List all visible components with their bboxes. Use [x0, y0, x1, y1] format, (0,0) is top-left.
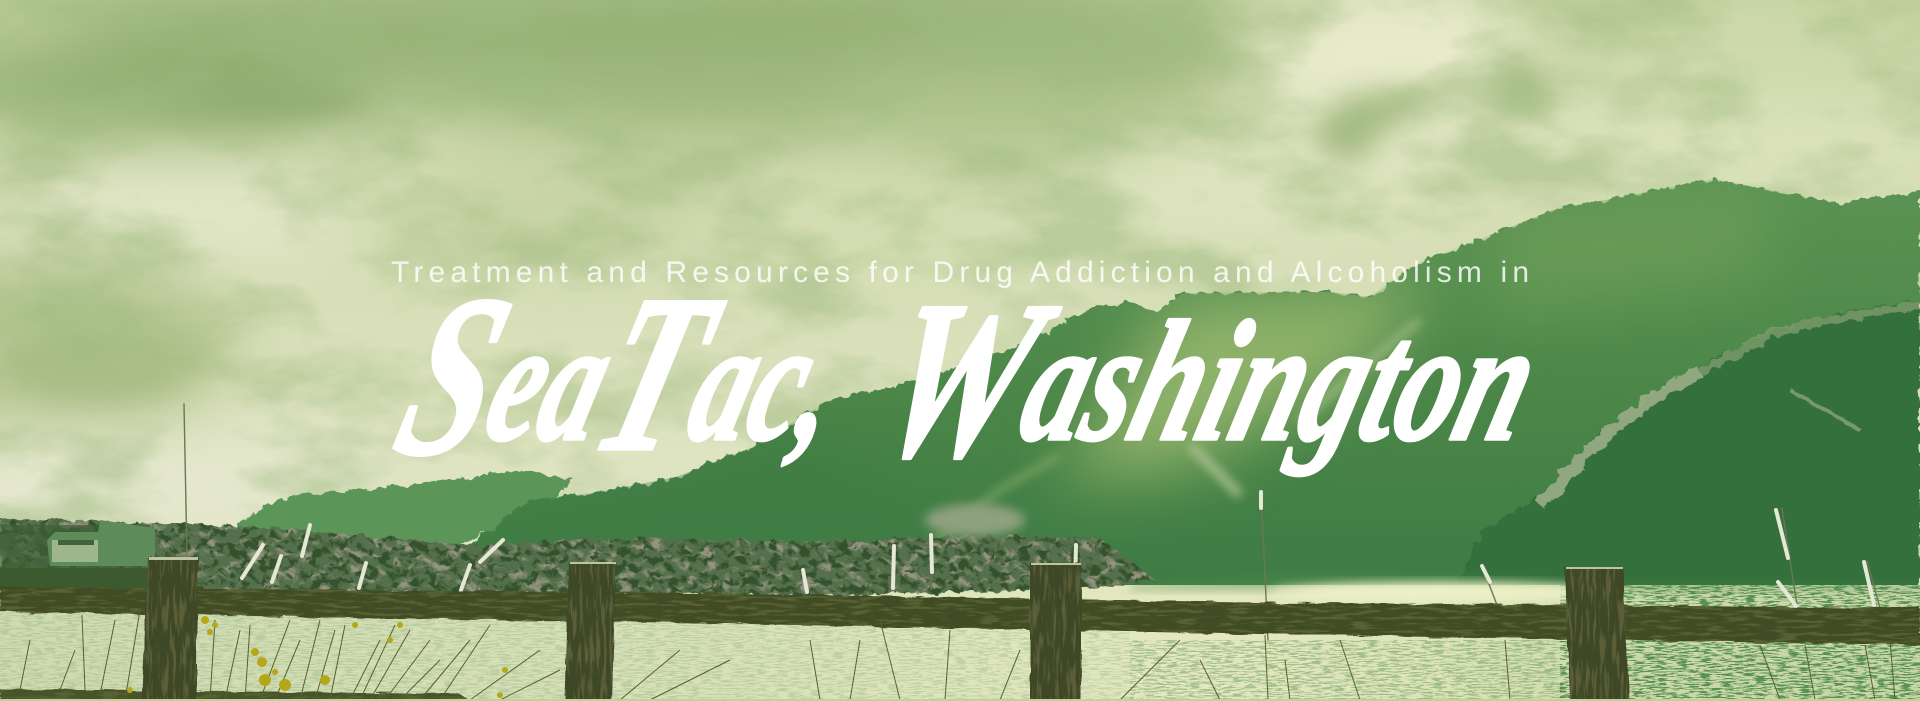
wooden fence [0, 557, 1920, 701]
lake water [0, 578, 1920, 701]
bright glare on water [1270, 582, 1610, 602]
tree line island [0, 504, 1157, 596]
main mountain range [469, 179, 1920, 620]
house on far shore [0, 520, 155, 590]
title: ashington [1004, 286, 1559, 476]
title: ea [469, 286, 633, 476]
right foreground mountain [1457, 300, 1920, 590]
title: W [854, 254, 1077, 504]
sky with clouds [0, 0, 1920, 560]
subtitle: Treatment and Resources for Drug Addiction and Alcoholism in [391, 256, 1529, 289]
shoreline right [1130, 574, 1920, 590]
foreground grass and yellow flowers [20, 610, 1895, 700]
title: T [572, 248, 742, 498]
left distant mountain [232, 469, 575, 545]
pampas grass plumes [184, 404, 1880, 640]
title [375, 248, 1568, 504]
title: S [375, 248, 534, 503]
bottom edge strip [0, 699, 1920, 701]
title: ac, [671, 286, 865, 476]
